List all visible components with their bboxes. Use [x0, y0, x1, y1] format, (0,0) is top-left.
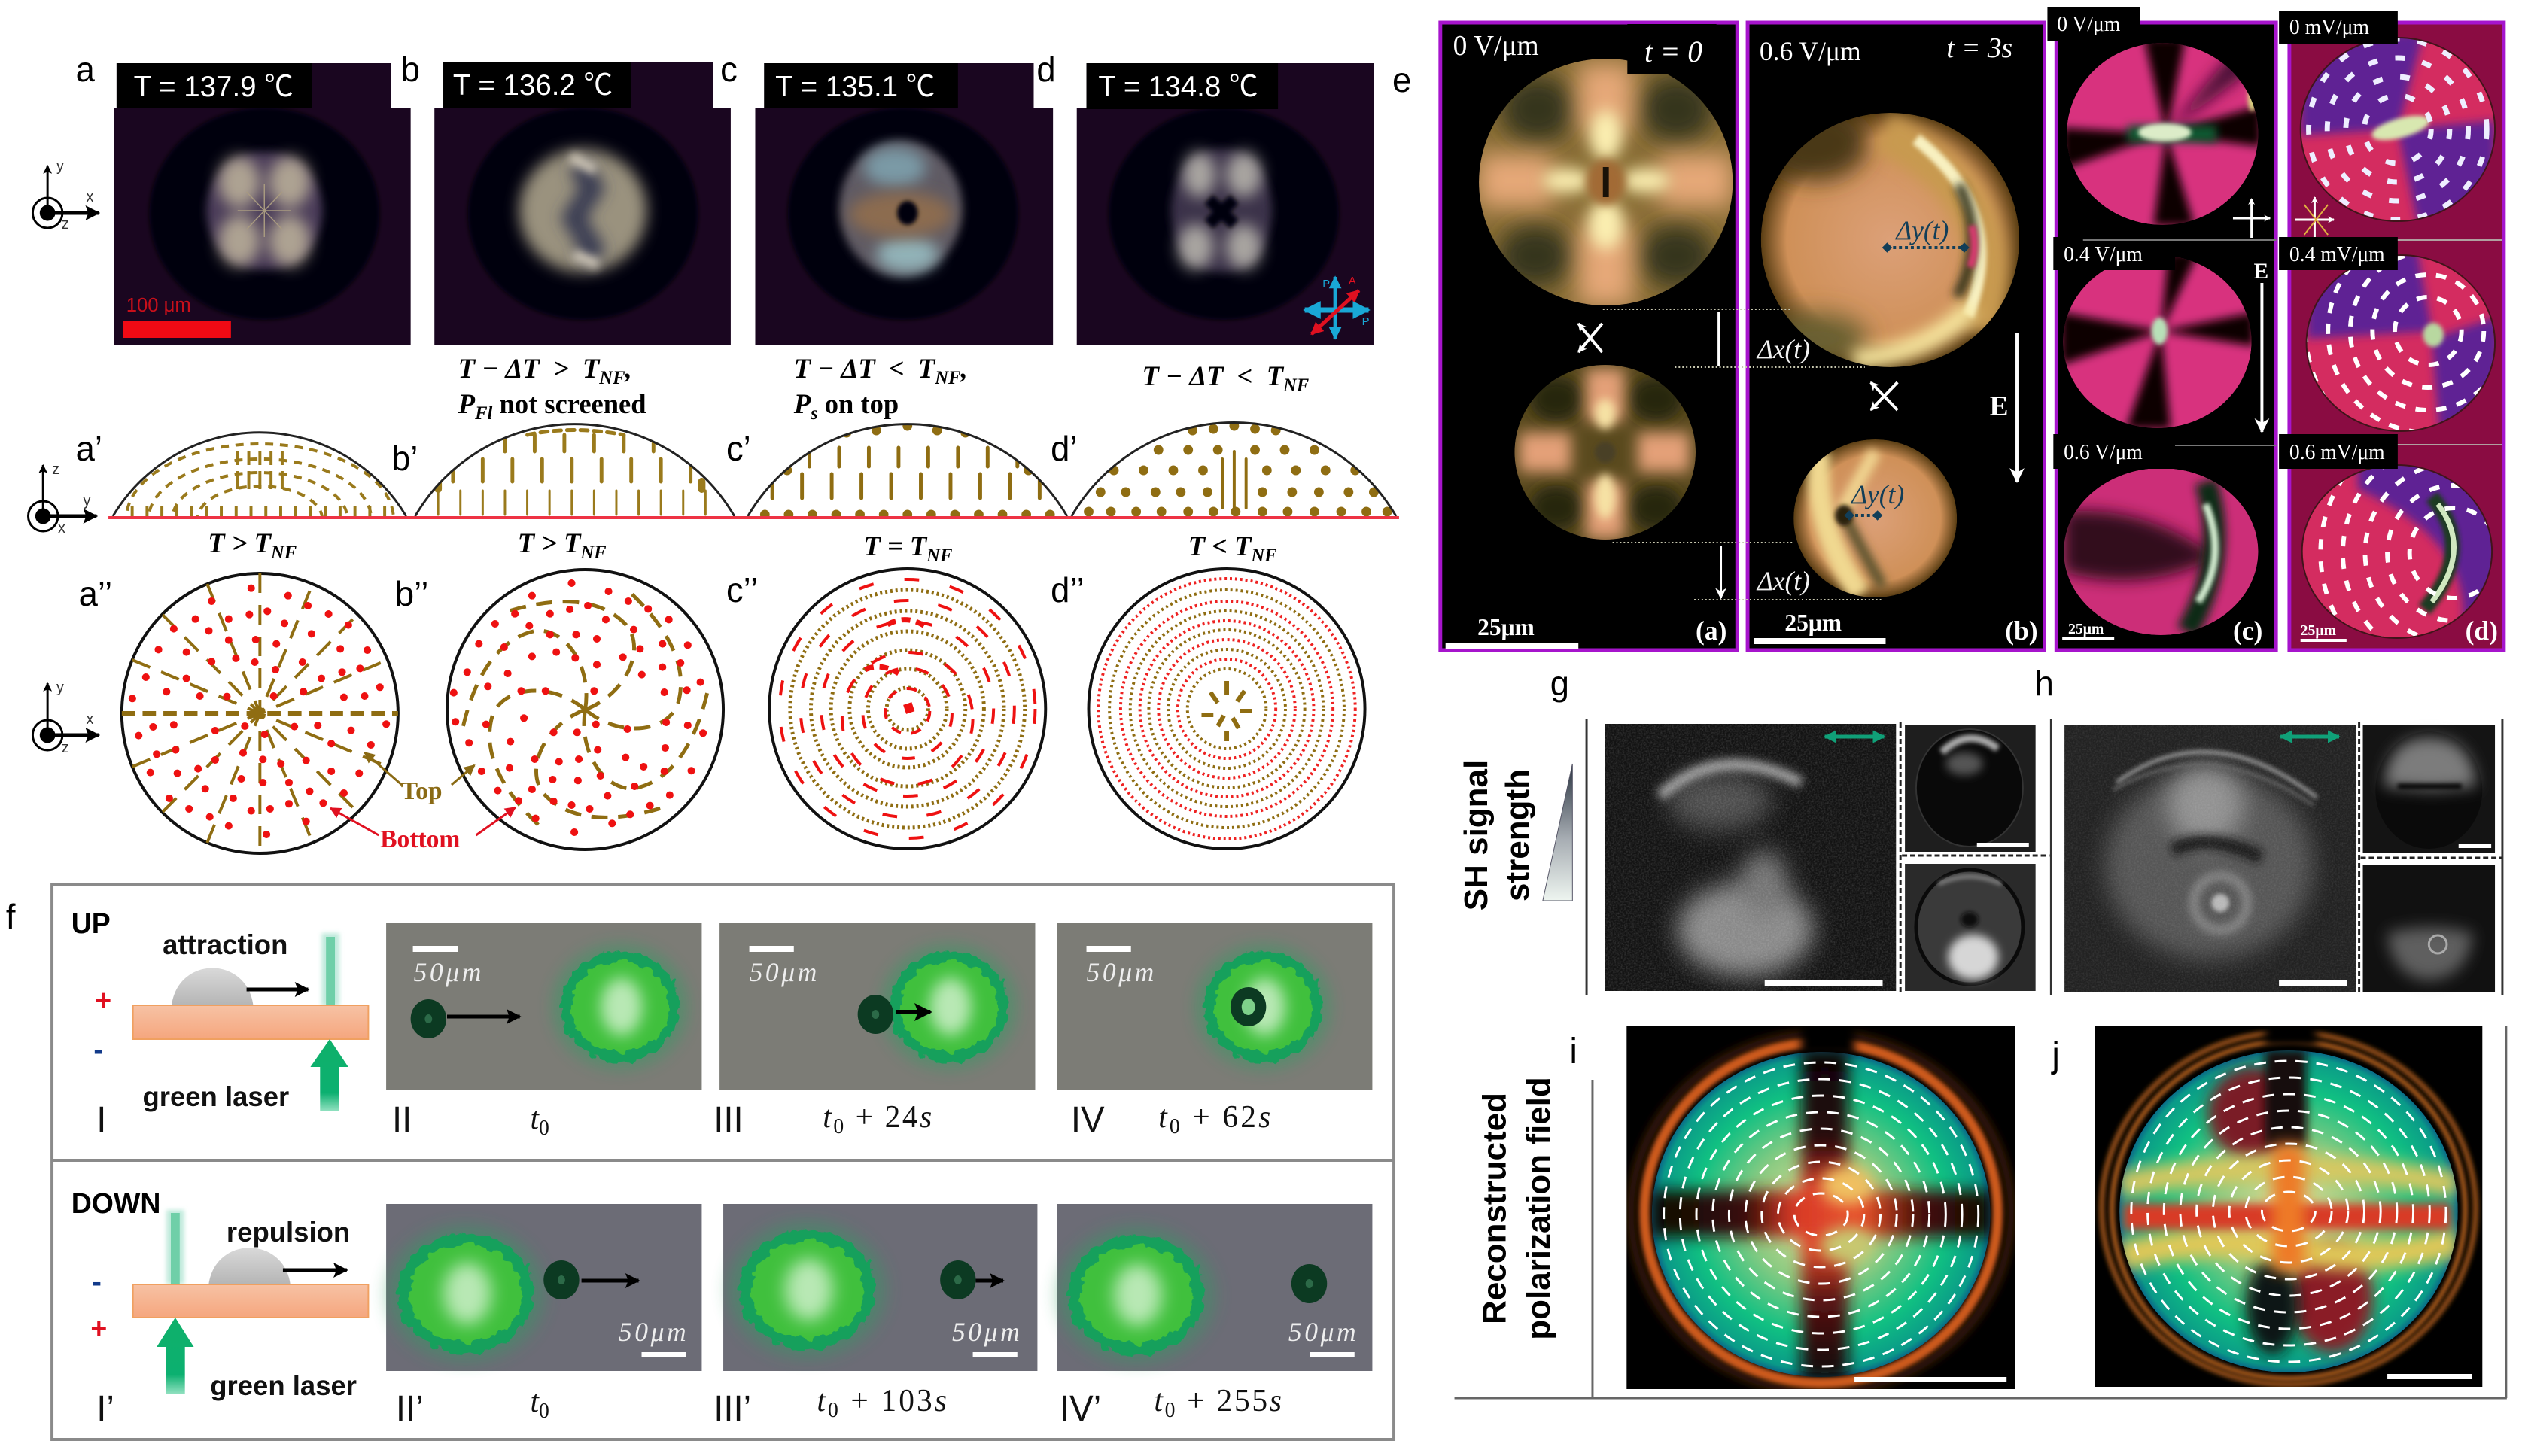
letters a' to d': c’	[726, 430, 751, 468]
letters a'' to d'': a’’	[79, 575, 112, 613]
panel e(d): polarization maps on maroon: (d)	[2466, 616, 2498, 646]
panel f UP labels: IV	[1071, 1100, 1105, 1140]
panel g: SH images	[1587, 719, 2049, 995]
temperature captions: NF	[580, 543, 607, 563]
panel f DOWN schematic: green laser	[210, 1370, 357, 1401]
axes: xy top	[32, 158, 99, 233]
map 0.4 mV/um	[2306, 207, 2522, 455]
axes: zy side: y	[84, 493, 90, 509]
letters i j: i	[1569, 1032, 1577, 1071]
panel e(b): droplet at 0.6 V/um: (b)	[2005, 616, 2038, 646]
letters a'' to d'': b’’	[395, 575, 429, 613]
panel e(b): droplet at 0.6 V/um: t = 3s	[1946, 32, 2012, 64]
panel f DOWN schematic: -	[92, 1266, 102, 1297]
panel e(b): droplet at 0.6 V/um: E	[1990, 391, 2009, 422]
captions under panels b c d: P	[458, 388, 475, 419]
panel f DOWN labels: III’	[713, 1389, 751, 1429]
panel e(c): pink droplet series: (c)	[2233, 616, 2262, 646]
captions under panels b c d: T − ΔT > T	[458, 353, 599, 384]
droplet 0.6 V/um	[2064, 468, 2258, 635]
right column: panels e, g, h, i, j	[1440, 7, 2522, 1399]
image IV: 50μm	[1087, 957, 1154, 987]
panel f UP labels	[392, 1100, 1270, 1140]
panel e(a): droplet at 0 V/um: 25μm	[1477, 614, 1535, 640]
panel f DOWN labels: 0	[828, 1399, 838, 1422]
temperature captions: NF	[270, 543, 297, 563]
panel f UP labels: II	[392, 1100, 412, 1140]
temperature captions: T = T	[864, 530, 926, 561]
map 0 mV/um	[2301, 30, 2495, 222]
panel e(b): droplet at 0.6 V/um: 25μm	[1784, 609, 1842, 636]
axes: xy top: x	[86, 189, 93, 205]
axes: zy side: z	[52, 461, 59, 478]
captions under panels b c d: on top	[818, 388, 899, 419]
image IV	[1057, 923, 1372, 1090]
image IV': 50μm	[1288, 1317, 1356, 1347]
panel d: POM image at 134.8 C: T = 134.8 ℃	[1098, 71, 1258, 103]
panel b: POM image at 136.2 C	[434, 62, 731, 345]
panel e(c): pink droplet series: 0 V/μm	[2057, 13, 2121, 36]
dome b'	[415, 424, 735, 516]
captions under panels b c d: s	[810, 403, 818, 424]
panel f DOWN labels: t	[1154, 1384, 1163, 1418]
icon: polarizer and analyzer cross: P	[1362, 316, 1370, 328]
panel letters a to e: d	[1036, 50, 1056, 89]
panel b: POM image at 136.2 C: T = 136.2 ℃	[453, 69, 613, 102]
panel e(a): droplet at 0 V/um	[1440, 23, 1737, 650]
image II': 50μm	[619, 1317, 686, 1347]
panel e(b): droplet at 0.6 V/um: Δy(t)	[1894, 215, 1949, 245]
panel f DOWN labels: t	[817, 1384, 826, 1418]
polarizer cross	[1578, 324, 1602, 352]
panel j: reconstructed field	[2095, 1020, 2482, 1387]
panel e(d): polarization maps on maroon: 25μm	[2301, 622, 2336, 639]
panel f UP schematic: I	[96, 1100, 106, 1140]
panel i: reconstructed field	[1626, 1020, 2015, 1392]
captions under panels b c d	[458, 353, 1310, 424]
boxes and labels	[2047, 7, 2140, 41]
temperature captions	[208, 527, 1277, 566]
inset top	[1905, 725, 2036, 852]
panel letters a to e	[76, 50, 1411, 99]
panel f DOWN labels: 0	[539, 1400, 549, 1423]
inset bottom	[1905, 864, 2036, 991]
panel e(a): droplet at 0 V/um: 0 V/μm	[1453, 30, 1539, 62]
Reconstructed polarization field axis title: polarization field	[1520, 1077, 1557, 1340]
panel a: POM image at 137.9 C	[114, 63, 411, 345]
panel f DOWN schematic: repulsion	[227, 1217, 350, 1248]
panel letters a to e: e	[1392, 61, 1411, 99]
panel f UP schematic: green laser	[142, 1081, 289, 1112]
panel f DOWN labels: s	[935, 1384, 947, 1418]
panel e(d): polarization maps on maroon: 0.6 mV/μm	[2289, 441, 2385, 464]
Reconstructed polarization field axis title	[1477, 1077, 1557, 1340]
captions under panels b c d: T − ΔT < T	[1142, 360, 1283, 391]
axes: xy top: z	[62, 216, 69, 233]
panel f DOWN schematic: DOWN	[71, 1187, 160, 1219]
letters a' to d': d’	[1051, 430, 1078, 468]
top view a'': radial pattern	[122, 573, 398, 853]
inset bottom	[2363, 865, 2495, 992]
panel f DOWN labels: IV’	[1060, 1389, 1101, 1429]
captions under panels b c d: ,	[960, 353, 968, 384]
panel e(b): droplet at 0.6 V/um: Δx(t)	[1756, 566, 1810, 596]
image III'	[723, 1204, 1037, 1371]
panel e(c): pink droplet series: 0.4 V/μm	[2064, 243, 2143, 266]
panel f UP labels: 0	[1170, 1115, 1180, 1138]
substrate line in red	[108, 516, 1399, 519]
temperature captions: T > T	[208, 527, 271, 558]
axes: xy lower	[32, 679, 99, 756]
polarizer icon	[2295, 197, 2334, 244]
dome a'	[111, 431, 407, 516]
SH signal strength axis title	[1458, 760, 1536, 910]
top view b'': spiral pattern	[447, 563, 723, 856]
image II	[386, 923, 701, 1090]
axes: xy lower: x	[86, 711, 93, 728]
icon: intensity wedge	[1543, 764, 1572, 901]
SH signal strength axis title: strength	[1499, 769, 1536, 901]
panel f frame	[52, 885, 1394, 1439]
temperature captions: T > T	[518, 527, 580, 558]
axes: zy side: x	[58, 520, 65, 537]
panel f DOWN schematic: I’	[96, 1389, 114, 1429]
dome c'	[748, 424, 1067, 516]
panel e(d): polarization maps on maroon: 0.4 mV/μm	[2289, 243, 2385, 266]
displacement guides across panels a and b	[1603, 309, 1883, 600]
image II: 50μm	[414, 957, 481, 987]
axes: xy lower: z	[62, 740, 69, 756]
captions under panels b c d: not screened	[492, 388, 646, 419]
dome d'	[1072, 423, 1396, 516]
panel f UP schematic: -	[93, 1034, 103, 1065]
panel e(d): polarization maps on maroon: 0 mV/μm	[2289, 16, 2369, 39]
panel f DOWN labels	[396, 1384, 1282, 1429]
panel f label: f	[6, 898, 16, 936]
image III': 50μm	[952, 1317, 1020, 1347]
panel a: POM image at 137.9 C: 100 μm	[126, 295, 191, 316]
panel letters a to e: c	[720, 50, 738, 89]
letters a' to d': b’	[391, 439, 418, 478]
panel f DOWN labels: II’	[396, 1389, 424, 1429]
panel f UP schematic: UP	[71, 907, 111, 939]
panel f DOWN labels: s	[1270, 1384, 1282, 1418]
letters a' to d'	[76, 430, 1078, 478]
image II'	[386, 1204, 701, 1371]
callout: Top and Bottom labels with leader lines: Top	[401, 777, 443, 805]
panel e(b): droplet at 0.6 V/um: Δx(t)	[1756, 334, 1810, 364]
panel f UP labels: s	[1258, 1100, 1270, 1135]
panel letters a to e: a	[76, 50, 95, 89]
panel f DOWN labels: + 103	[841, 1384, 932, 1418]
panel f DOWN labels: t	[531, 1385, 539, 1419]
panel e(c): pink droplet series	[2047, 7, 2276, 650]
panel f UP schematic	[71, 907, 368, 1140]
panel e(b): droplet at 0.6 V/um	[1748, 23, 2044, 650]
axes: zy side	[28, 461, 96, 537]
panel f UP schematic: +	[95, 984, 111, 1016]
axes: xy lower: y	[56, 679, 64, 696]
panel letters g h: h	[2035, 664, 2054, 703]
captions under panels b c d: Fl	[474, 403, 492, 424]
panel d: POM image at 134.8 C	[1077, 63, 1374, 345]
callout: Top and Bottom labels with leader lines	[330, 752, 516, 853]
letters a'' to d''	[79, 571, 1085, 613]
captions under panels b c d: NF	[1282, 375, 1310, 396]
inset top	[2363, 725, 2495, 853]
panel f UP labels: t	[531, 1102, 539, 1136]
top view c'': mixed rings	[769, 569, 1045, 849]
panel f UP labels: 0	[539, 1117, 549, 1140]
letters i j: j	[2050, 1035, 2060, 1075]
panel f UP labels: t	[1158, 1100, 1167, 1135]
polarizer cross	[1871, 382, 1897, 410]
panel f UP schematic: attraction	[163, 929, 287, 960]
panel letters g h	[1550, 664, 2054, 703]
panel letters g h: g	[1550, 664, 1569, 703]
captions under panels b c d: NF	[598, 368, 625, 388]
panel e(c): pink droplet series: 0.6 V/μm	[2064, 441, 2143, 464]
panel f UP labels: s	[920, 1100, 932, 1135]
letters a' to d': a’	[76, 430, 102, 468]
panel f UP labels: 0	[833, 1115, 844, 1138]
panel e(d): polarization maps on maroon	[2279, 11, 2522, 711]
panel e(b): droplet at 0.6 V/um: Δy(t)	[1850, 479, 1904, 509]
panel c: POM image at 135.1 C: T = 135.1 ℃	[775, 71, 935, 103]
temperature captions: NF	[926, 546, 953, 566]
panel c: POM image at 135.1 C	[755, 63, 1053, 345]
Reconstructed polarization field axis title: Reconstructed	[1477, 1093, 1514, 1324]
image III: 50μm	[750, 957, 817, 987]
left column: panels a to d and f	[6, 50, 1411, 1439]
panel e(c): pink droplet series: E	[2254, 259, 2268, 284]
captions under panels b c d: T − ΔT < T	[794, 353, 935, 384]
panel e(a): droplet at 0 V/um: (a)	[1696, 616, 1726, 646]
panel e(a): droplet at 0 V/um: t = 0	[1644, 35, 1702, 68]
panel f DOWN schematic	[71, 1187, 368, 1429]
captions under panels b c d: P	[794, 388, 811, 419]
panel letters a to e: b	[401, 50, 420, 89]
droplet upper moved	[1761, 105, 2019, 367]
temperature captions: NF	[1250, 546, 1277, 566]
captions under panels b c d: ,	[625, 353, 632, 384]
icon: polarizer and analyzer cross: A	[1349, 275, 1356, 287]
panel f DOWN labels: 0	[1165, 1399, 1175, 1422]
panel a: POM image at 137.9 C: T = 137.9 ℃	[134, 71, 294, 103]
droplet 0.4 V/um	[2061, 252, 2254, 429]
letters a'' to d'': c’’	[726, 571, 758, 609]
icon: polarizer and analyzer cross: P	[1322, 278, 1330, 290]
top view d'': concentric rings	[1089, 569, 1365, 849]
axes: xy top: y	[56, 158, 64, 175]
image IV'	[1057, 1204, 1372, 1371]
droplet 0 V/um	[2062, 38, 2261, 226]
image III	[719, 923, 1035, 1090]
SH signal strength axis title: SH signal	[1458, 760, 1495, 910]
panel h: SH images	[2051, 719, 2502, 995]
temperature captions: T < T	[1188, 530, 1251, 561]
captions under panels b c d: NF	[934, 368, 961, 388]
droplet upper	[1479, 59, 1733, 305]
panel f UP labels: III	[713, 1100, 744, 1140]
map 0.6 mV/um	[2298, 395, 2522, 711]
boxes and labels	[2279, 11, 2398, 44]
icon: polarizer and analyzer cross	[1305, 275, 1370, 339]
panel f UP labels: + 24	[846, 1100, 918, 1135]
panel e(c): pink droplet series: 25μm	[2068, 621, 2104, 637]
letters a'' to d'': d’’	[1051, 571, 1085, 609]
droplet lower moved	[1793, 439, 1957, 597]
panel f DOWN schematic: +	[90, 1312, 107, 1344]
droplet lower	[1514, 365, 1696, 540]
callout: Top and Bottom labels with leader lines: Bottom	[380, 825, 460, 853]
panel f UP labels: t	[823, 1100, 832, 1135]
side view row: domes a' to d'	[111, 421, 1397, 516]
axis frame lines	[1455, 1026, 2507, 1399]
panel e(b): droplet at 0.6 V/um: 0.6 V/μm	[1760, 36, 1861, 66]
letters i j	[1569, 1032, 2060, 1075]
panel f DOWN labels: + 255	[1177, 1384, 1267, 1418]
panel f UP labels: + 62	[1182, 1100, 1256, 1135]
